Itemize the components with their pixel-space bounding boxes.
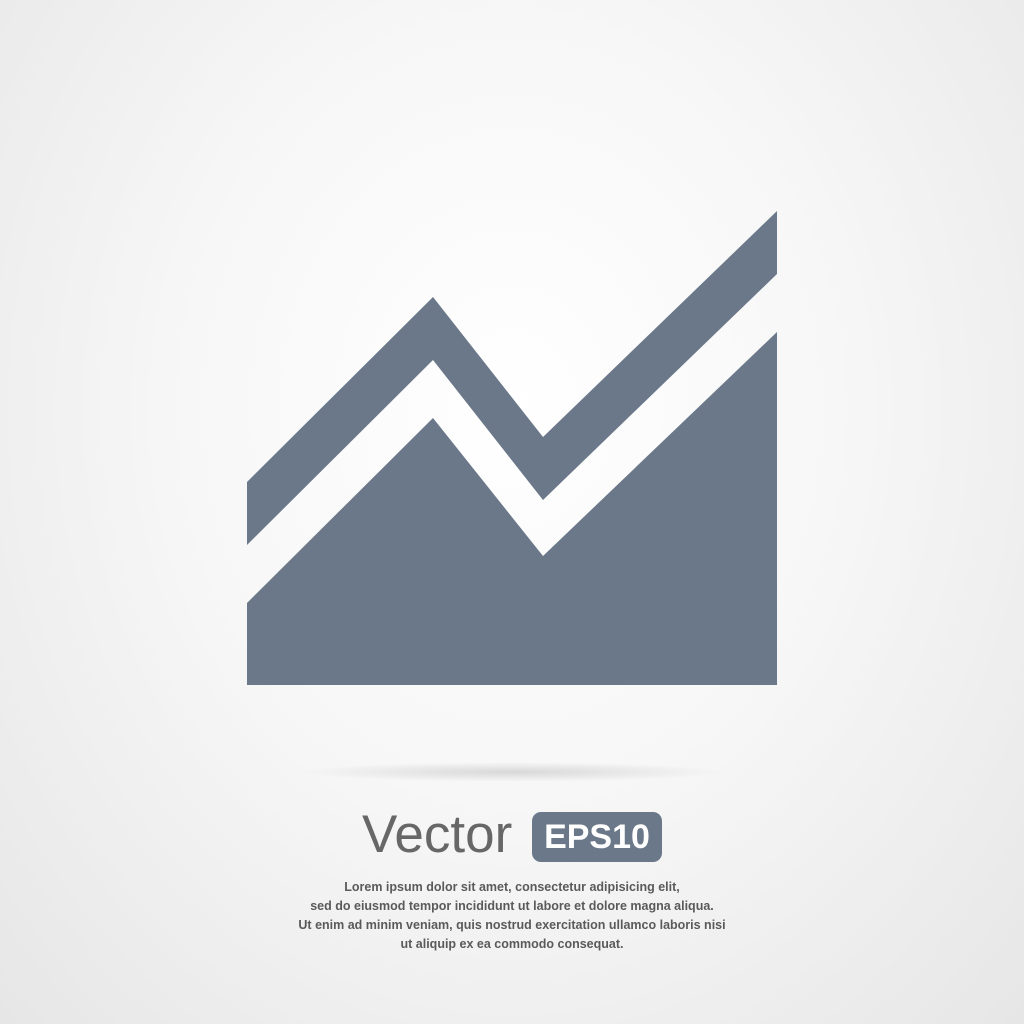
- badge: EPS10: [532, 812, 662, 862]
- text block: lorem ipsum: Ut enim ad minim veniam, quis nostrud exercitation ullamco laboris nisi: [298, 918, 726, 932]
- title: Vector: Vector: [362, 805, 512, 864]
- badge: EPS10: EPS10: [544, 818, 650, 856]
- text block: lorem ipsum: Lorem ipsum dolor sit amet, consectetur adipisicing elit,: [344, 880, 680, 894]
- text block: lorem ipsum: ut aliquip ex ea commodo consequat.: [401, 937, 623, 951]
- text block: lorem ipsum: [298, 880, 726, 951]
- text block: lorem ipsum: sed do eiusmod tempor incididunt ut labore et dolore magna aliqua.: [310, 899, 714, 913]
